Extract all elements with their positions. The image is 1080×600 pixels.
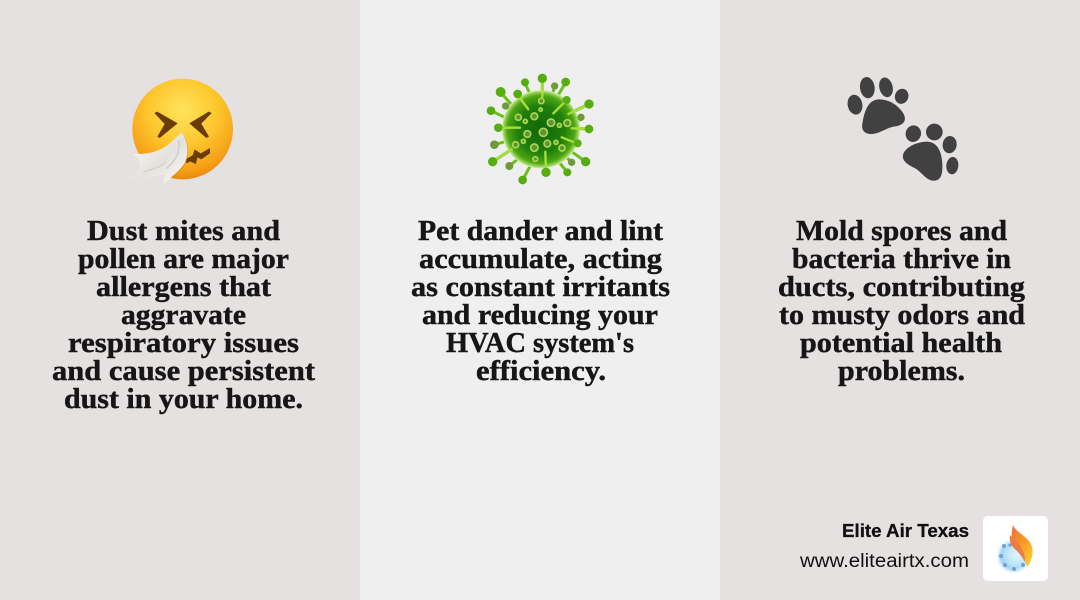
text: dust mites description: dust in your home. <box>64 383 303 415</box>
text: mold spores description: problems. <box>838 355 965 387</box>
panel: pet dander and lint <box>360 0 720 600</box>
icon: company logo <box>983 516 1048 581</box>
text: dust mites description: aggravate <box>121 299 246 331</box>
text: mold spores description: to musty odors and <box>779 299 1025 331</box>
icon: sneezing face emoji <box>129 79 233 184</box>
text: pet dander description: HVAC system's <box>446 327 634 359</box>
text: pet dander description: Pet dander and lint <box>418 215 663 247</box>
text: mold spores description: Mold spores and <box>796 215 1007 247</box>
text: mold spores description <box>778 215 1026 387</box>
brand name: Elite Air Texas <box>842 521 969 541</box>
text: dust mites description: pollen are major <box>78 243 289 275</box>
website url: www.eliteairtx.com <box>799 551 969 572</box>
text: dust mites description: and cause persistent <box>52 355 315 387</box>
text: pet dander description <box>411 215 670 387</box>
text: mold spores description: bacteria thrive in <box>792 243 1011 275</box>
text: dust mites description: respiratory issues <box>68 327 299 359</box>
panel: mold spores and bacteria <box>720 0 1080 600</box>
text: pet dander description: efficiency. <box>476 355 606 387</box>
icon: green virus <box>487 74 594 184</box>
text: pet dander description: and reducing your <box>422 299 658 331</box>
text: mold spores description: potential health <box>800 327 1002 359</box>
panel: dust mites and pollen <box>0 0 360 600</box>
text: dust mites description: allergens that <box>96 271 271 303</box>
text: mold spores description: ducts, contributing <box>778 271 1026 303</box>
text: dust mites description: Dust mites and <box>87 215 280 247</box>
text: pet dander description: accumulate, acting <box>419 243 663 275</box>
text: dust mites description <box>52 215 315 415</box>
text: pet dander description: as constant irritants <box>411 271 670 303</box>
icon: paw prints <box>846 76 959 181</box>
